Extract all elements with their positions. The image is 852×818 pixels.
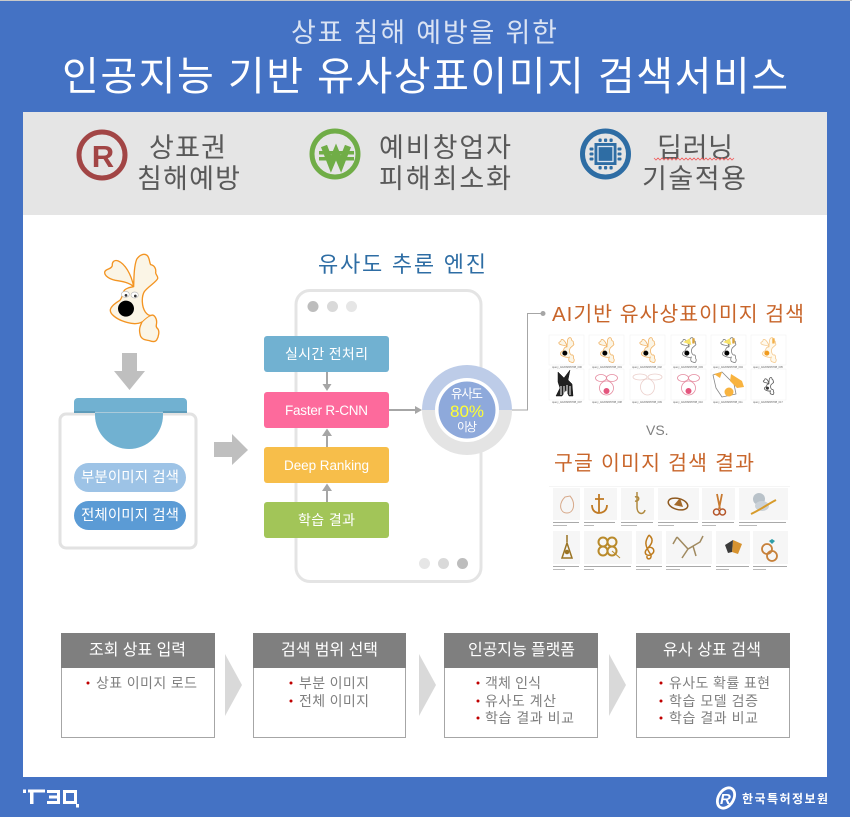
main white panel xyxy=(23,112,827,777)
panel: step 3 AI platform: 인공지능 플랫폼 xyxy=(468,641,575,659)
arrow: deep ranking up to R-CNN xyxy=(322,428,332,447)
result captions xyxy=(553,522,787,570)
arrow: down to input card xyxy=(114,353,145,390)
panel: step 4 similar trademark search: 학습 결과 비교 xyxy=(669,710,758,726)
icon: won coin xyxy=(312,131,358,177)
arrow: preprocessing to R-CNN xyxy=(322,372,332,391)
panel: step 4 similar trademark search: 유사도 확률 표현 xyxy=(669,675,770,691)
connector: gauge to results xyxy=(512,311,546,410)
button: partial image search: 부분이미지 검색 xyxy=(81,469,179,486)
gauge: similarity 80 percent: 유사도 xyxy=(451,387,483,401)
text: minimising harm to prospective founders: 피해최소화 xyxy=(379,164,511,194)
panel: step 2 search scope selection: 부분 이미지 xyxy=(299,675,369,691)
thumbnails row one xyxy=(559,338,776,362)
logo: Korea Institute of Patent Information: R xyxy=(720,791,731,808)
result: scissors xyxy=(717,494,722,509)
panel: AI search result thumbnails xyxy=(549,335,786,404)
box: realtime preprocessing xyxy=(264,336,389,372)
panel: step 3 AI platform: 학습 결과 비교 xyxy=(485,710,574,726)
main title: 인공지능 기반 유사상표이미지 검색서비스 xyxy=(62,55,788,99)
thumbnail captions: query_A0206805788_007 xyxy=(552,400,582,404)
thumbnail captions: query_A0206805788_002 xyxy=(632,365,662,369)
logo: Korea Institute of Patent Information xyxy=(714,785,828,811)
panel: step 3 AI platform xyxy=(444,633,598,738)
thumbnail captions: query_A0206805788_009 xyxy=(632,400,662,404)
gauge: similarity 80 percent: 80% xyxy=(450,402,484,421)
panel: step 1 query trademark input: 조회 상표 입력 xyxy=(89,641,186,659)
icon: registered trademark xyxy=(79,132,125,178)
panel: step 4 similar trademark search: 유사 상표 검색 xyxy=(663,641,761,659)
panel: step 2 search scope selection xyxy=(253,633,406,738)
box: realtime preprocessing: 실시간 전처리 xyxy=(285,346,368,362)
panel: search input card xyxy=(60,398,196,548)
box: Faster R-CNN xyxy=(264,392,389,428)
arrow: R-CNN to similarity gauge xyxy=(389,406,422,414)
arrow: card to engine xyxy=(214,434,248,465)
logo: Korea Institute of Patent Information: 한국특허정보원 xyxy=(742,791,828,806)
thumbnail captions: query_A0206805788_004 xyxy=(713,365,743,369)
text: minimising harm to prospective founders: 예비창업자 xyxy=(379,133,511,163)
title block xyxy=(62,18,788,99)
thumbnail captions: query_A0206805788_008 xyxy=(592,400,622,404)
box: Deep Ranking xyxy=(264,447,389,483)
result: treble clef xyxy=(645,535,654,559)
panel: step 3 AI platform: 유사도 계산 xyxy=(485,693,556,709)
thumbnails row two xyxy=(556,370,774,397)
text: trademark infringement prevention xyxy=(137,133,240,194)
panel: step 2 search scope selection: 검색 범위 선택 xyxy=(281,641,378,659)
heading: AI based similar trademark image search: AI기반 유사상표이미지 검색 xyxy=(552,303,804,326)
thumbnail captions: query_A0206805788_003 xyxy=(673,365,703,369)
button: whole image search xyxy=(74,501,186,530)
panel: step 1 query trademark input xyxy=(61,633,215,738)
heading: google image search results: 구글 이미지 검색 결과 xyxy=(554,452,754,475)
panel: step 1 query trademark input: 상표 이미지 로드 xyxy=(96,675,197,691)
subtitle: 상표 침해 예방을 위한 xyxy=(291,18,557,48)
arrow: step 3 to 4 xyxy=(609,654,626,716)
result: pear dog xyxy=(561,496,574,513)
text: deep learning applied: 기술적용 xyxy=(642,164,746,194)
box: learning result xyxy=(264,502,389,538)
panel: step 3 AI platform: 객체 인식 xyxy=(485,675,541,691)
text: deep learning applied: 딥러닝 xyxy=(657,133,733,163)
panel: key benefits band xyxy=(23,112,827,215)
result: hook xyxy=(635,492,645,513)
result: rings xyxy=(762,539,777,561)
result: clover xyxy=(598,538,620,558)
text: trademark infringement prevention: 침해예방 xyxy=(137,164,240,194)
panel: step 2 search scope selection: 전체 이미지 xyxy=(299,693,369,709)
gauge: similarity 80 percent xyxy=(422,365,512,455)
panel: inference engine device xyxy=(264,290,481,582)
arrow: learning result up to deep ranking xyxy=(322,484,332,502)
thumbnail captions: query_A0206805788_005 xyxy=(753,365,783,369)
button: whole image search: 전체이미지 검색 xyxy=(81,507,179,524)
result: koala xyxy=(751,493,776,514)
result: anchor xyxy=(592,494,607,513)
panel: google image results xyxy=(549,486,790,570)
result: paw pendant xyxy=(562,535,572,558)
thumbnail captions xyxy=(552,365,783,404)
arrow: step 2 to 3 xyxy=(419,654,436,716)
button: partial image search xyxy=(74,463,186,492)
box: Deep Ranking: Deep Ranking xyxy=(284,458,369,473)
box: learning result: 학습 결과 xyxy=(298,512,355,528)
text: deep learning applied xyxy=(642,133,746,194)
text: minimising harm to prospective founders xyxy=(379,133,511,194)
arrow: step 1 to 2 xyxy=(225,654,242,716)
thumbnail captions: query_A0206805788_001 xyxy=(592,365,622,369)
thumbnail captions: query_A0206805788_017 xyxy=(753,400,783,404)
box: Faster R-CNN: Faster R-CNN xyxy=(285,403,368,418)
thumbnail captions: query_A0206805788_010 xyxy=(673,400,703,404)
logo: T30 xyxy=(23,790,79,808)
result: lizard xyxy=(673,536,703,558)
icon: query rabbit logo xyxy=(105,254,159,341)
thumbnail captions: query_A0206805788_000 xyxy=(552,365,582,369)
panel: step 4 similar trademark search: 학습 모델 검증 xyxy=(669,693,758,709)
result: ellipse emblem xyxy=(667,496,689,512)
icon: registered trademark: R xyxy=(92,139,114,174)
text: trademark infringement prevention: 상표권 xyxy=(149,133,226,163)
panel: step 4 similar trademark search xyxy=(636,633,790,738)
gauge: similarity 80 percent: 이상 xyxy=(457,420,477,434)
thumbnail captions: query_A0206805788_011 xyxy=(713,400,743,404)
text: versus: VS. xyxy=(646,422,669,438)
result: butterfly xyxy=(725,540,742,554)
icon: chip xyxy=(582,131,628,177)
heading: similarity inference engine: 유사도 추론 엔진 xyxy=(318,252,486,277)
